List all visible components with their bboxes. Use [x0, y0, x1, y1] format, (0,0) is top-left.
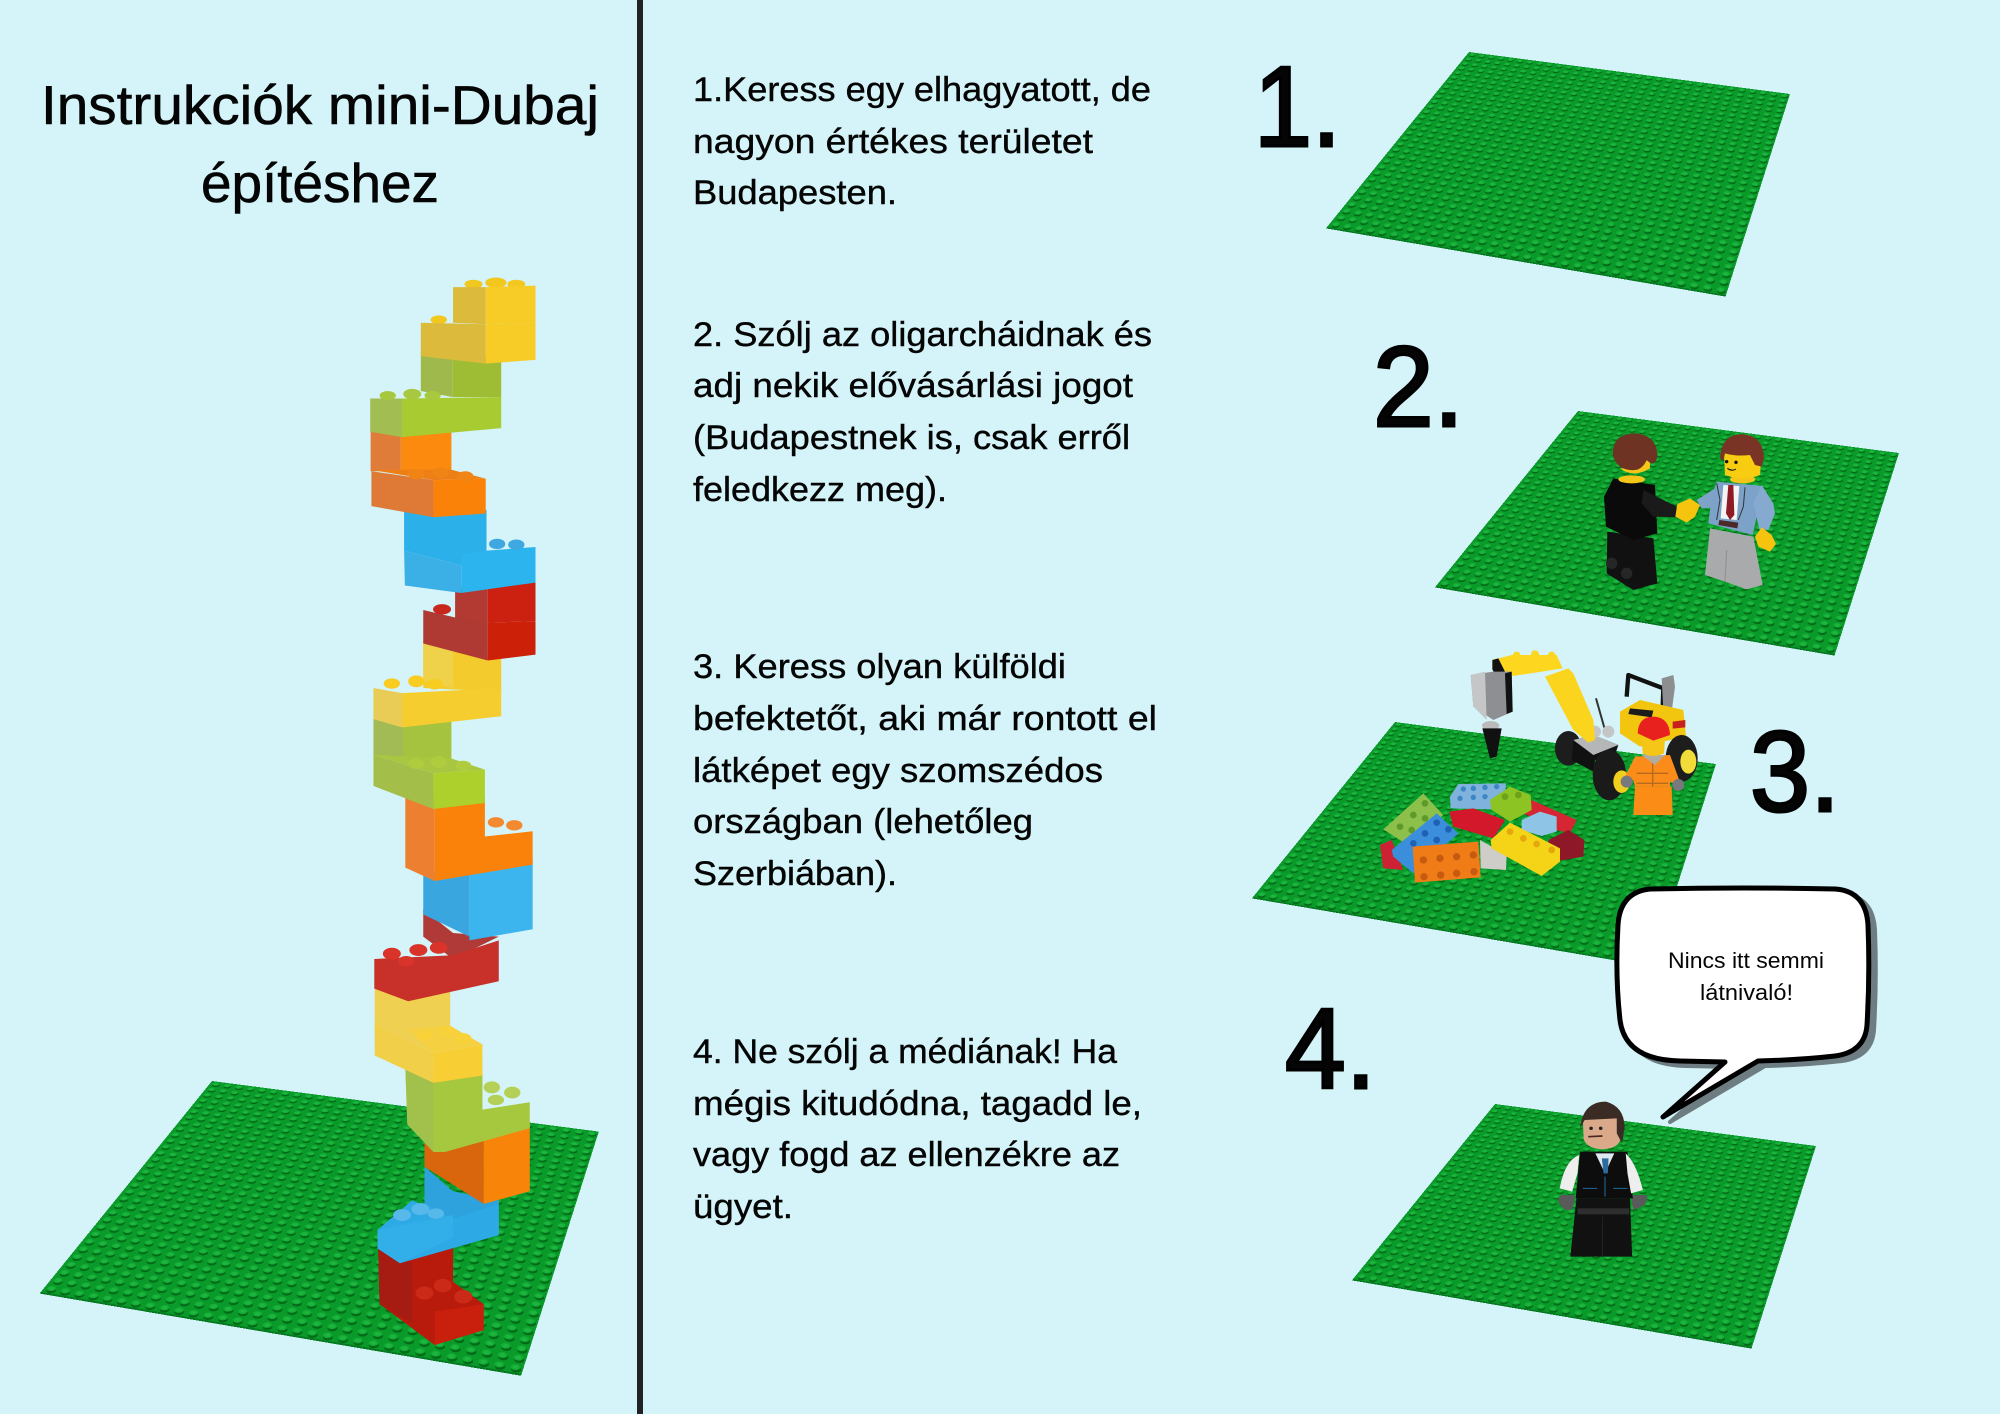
minifigures shaking hands	[1604, 433, 1776, 590]
text block: step 4: ügyet.	[693, 1188, 793, 1226]
number 3: 3.	[1750, 709, 1840, 836]
lime bricks lower	[405, 1067, 530, 1152]
text block: step 2: feledkezz meg).	[693, 471, 947, 509]
title	[41, 74, 599, 214]
speech bubble	[1617, 888, 1876, 1122]
text block: step 3: 3. Keress olyan külföldi	[693, 648, 1066, 686]
bottom blue bricks	[378, 1167, 499, 1263]
title: építéshez	[201, 152, 439, 214]
pile of bricks	[1380, 783, 1584, 883]
minifigure in blue suit	[1697, 434, 1776, 589]
text block: step 2: adj nekik elővásárlási jogot	[693, 367, 1134, 405]
speech bubble: Nincs itt semmi	[1668, 948, 1824, 973]
text block: step 3	[693, 648, 1157, 893]
blue bricks top	[404, 510, 536, 593]
speech bubble: látnivaló!	[1700, 980, 1793, 1005]
bottom red brick	[378, 1241, 484, 1345]
blue bricks middle	[423, 859, 533, 940]
orange brick over blue	[424, 1122, 530, 1204]
number 4: 4.	[1285, 986, 1376, 1113]
orange bricks top	[371, 430, 486, 517]
text block: step 4: 4. Ne szólj a médiának! Ha	[693, 1033, 1117, 1071]
yellow bricks middle	[373, 640, 501, 727]
yellow bricks top	[421, 277, 536, 364]
lime bricks middle	[373, 716, 485, 809]
text block: step 1: nagyon értékes területet	[693, 123, 1094, 161]
number 1: 1.	[1254, 44, 1341, 171]
text block: step 2: (Budapestnek is, csak erről	[693, 419, 1130, 457]
green baseplate: step 1	[1327, 52, 1790, 295]
yellow bricks lower	[375, 985, 482, 1083]
excavator	[1471, 650, 1698, 800]
text block: step 4	[693, 1033, 1142, 1226]
green baseplate: main tower	[41, 1081, 599, 1374]
construction worker	[1621, 717, 1684, 815]
construction scene	[1380, 650, 1698, 883]
green baseplate: step 4	[1353, 1104, 1816, 1347]
text block: step 1: 1.Keress egy elhagyatott, de	[693, 71, 1151, 109]
text block: step 1: Budapesten.	[693, 174, 897, 212]
text block: step 4: vagy fogd az ellenzékre az	[693, 1136, 1120, 1174]
minifigure in black vest	[1558, 1102, 1647, 1257]
green baseplate: step 3	[1253, 722, 1716, 965]
lime bricks top	[370, 352, 501, 437]
vertical divider	[637, 0, 643, 1414]
text block: step 4: mégis kitudódna, tagadd le,	[693, 1085, 1142, 1123]
brick tower	[370, 277, 536, 1345]
minifigure in black	[1604, 433, 1700, 590]
green baseplate: step 2	[1436, 411, 1899, 654]
red bricks top	[423, 580, 536, 661]
text block: step 3: országban (lehetőleg	[693, 803, 1033, 841]
title: Instrukciók mini-Dubaj	[41, 74, 599, 136]
red bricks middle	[374, 909, 499, 1001]
text block: step 3: látképet egy szomszédos	[693, 752, 1103, 790]
text block: step 2: 2. Szólj az oligarcháidnak és	[693, 316, 1152, 354]
text block: step 1	[693, 71, 1151, 212]
orange bricks middle	[405, 796, 533, 881]
text block: step 3: Szerbiában).	[693, 855, 897, 893]
number 2: 2.	[1373, 324, 1464, 451]
text block: step 2	[693, 316, 1152, 509]
text block: step 3: befektetőt, aki már rontott el	[693, 700, 1157, 738]
